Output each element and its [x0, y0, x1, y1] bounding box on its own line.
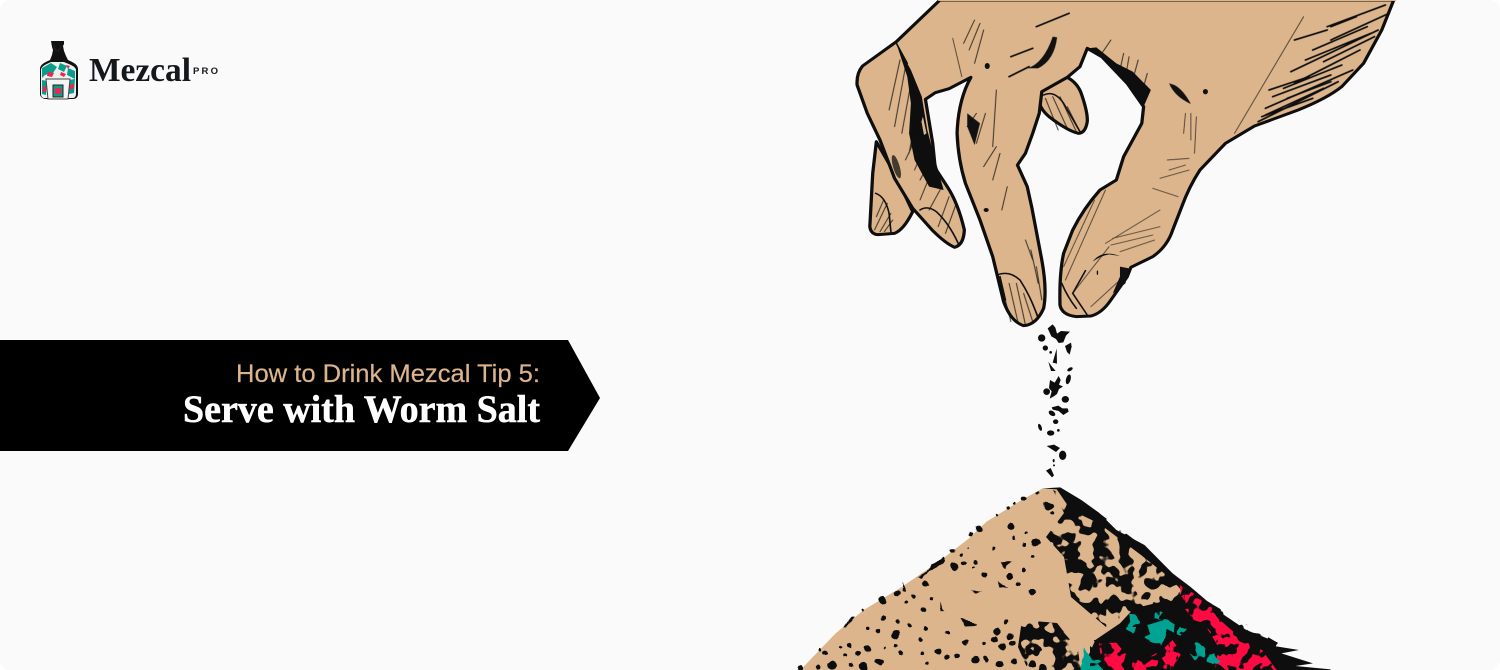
pile black speckles: dense upper right — [1046, 490, 1187, 627]
finger nails and creases — [876, 43, 1087, 318]
back finger index piece — [1039, 77, 1087, 133]
pile black speckles: scattered dots — [798, 491, 1053, 670]
shading: blotches — [890, 37, 1208, 293]
logo: Mezcal Pro — [40, 41, 218, 99]
illustration: hand pinching salt — [857, 0, 1396, 326]
logo wordmark: Mezcal — [89, 52, 191, 89]
pile lower red patch — [1099, 640, 1181, 670]
icon: mezcal bottle — [40, 41, 78, 99]
shading: ring finger dark fold — [896, 43, 944, 190]
pile black speckles: lower centre clump — [1018, 620, 1081, 670]
pile tan body — [799, 488, 1190, 670]
banner arrow shape — [0, 340, 600, 451]
pile black outer edge — [1043, 487, 1331, 670]
banner heading: Serve with Worm Salt — [183, 388, 540, 431]
shading: hatch lines — [875, 5, 1389, 325]
banner eyebrow text: How to Drink Mezcal Tip 5: — [236, 360, 540, 388]
title banner — [0, 340, 600, 451]
falling salt grains — [1037, 324, 1073, 477]
back finger — [870, 142, 913, 235]
shading: web between fingers — [1087, 47, 1151, 107]
pile black core — [1081, 602, 1218, 670]
logo superscript: PRO — [193, 66, 218, 77]
pile black speckles: over colours — [1170, 587, 1281, 670]
pile teal patches — [1079, 610, 1220, 670]
hand body — [857, 0, 1394, 326]
pile red band — [1180, 585, 1278, 670]
pile black speckles: over lower red — [1090, 640, 1170, 670]
illustration: salt pile — [798, 487, 1331, 670]
